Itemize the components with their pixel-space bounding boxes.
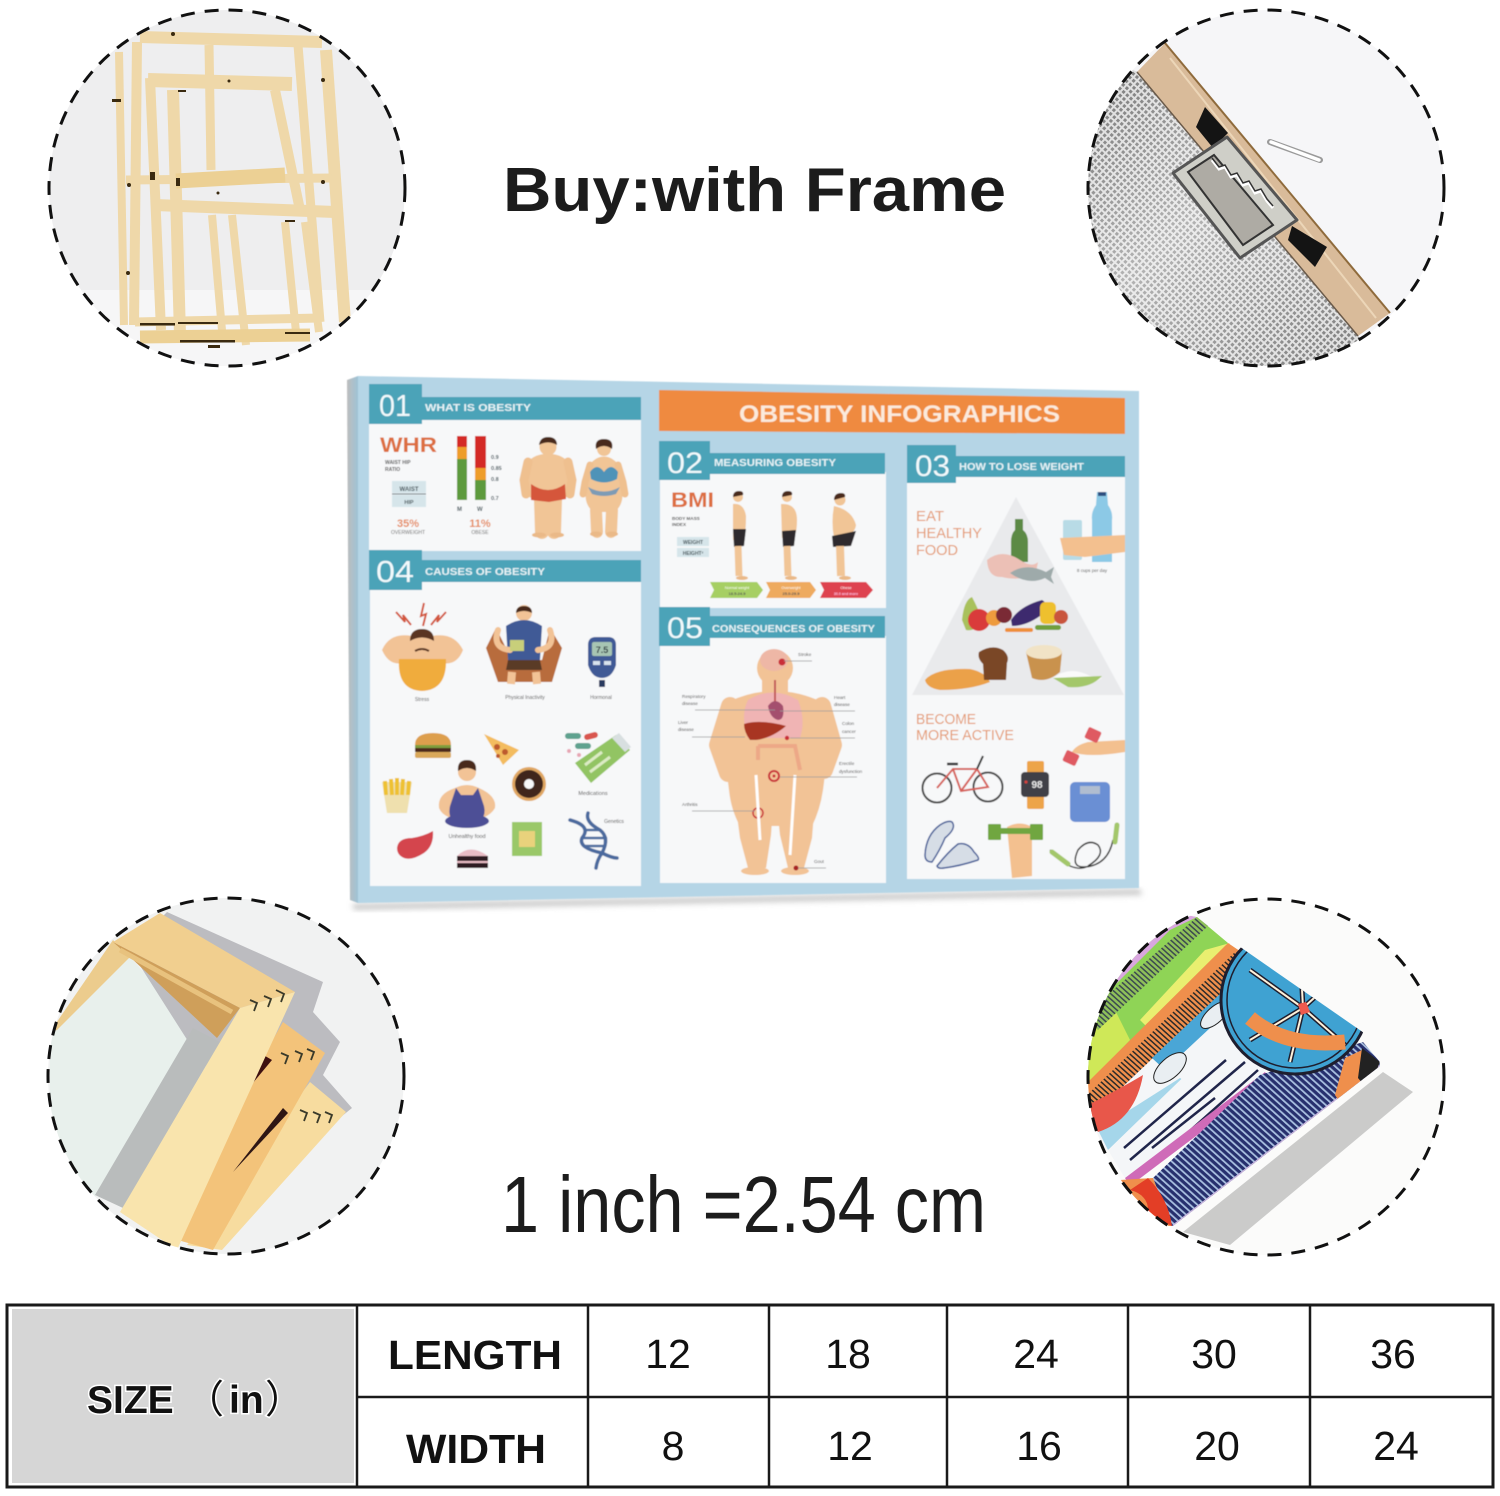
- organ labels: Arthritis: [682, 802, 698, 807]
- WHR block: WAIST: [400, 487, 419, 493]
- chart: waist hip ratio bars: 0.7: [491, 496, 499, 502]
- table header: size in inches: ）: [265, 1379, 304, 1422]
- table label: length: LENGTH: [388, 1332, 562, 1378]
- bmi arrow: normal: 18.5-24.9: [729, 591, 746, 596]
- panel 03: how to lose weight: [907, 445, 1125, 879]
- size table: [7, 1305, 1493, 1487]
- illustration: woman eating unhealthy food: [439, 760, 495, 840]
- icon: fish: [1010, 567, 1054, 584]
- BMI block: WEIGHT: [683, 540, 703, 546]
- label: genetics: Genetics: [604, 819, 624, 825]
- icon: vegetables and fruit: [962, 597, 1068, 632]
- organ labels: disease: [682, 701, 698, 706]
- photo circle: stacked frame corners: [46, 896, 406, 1256]
- heading: eat healthy food: [916, 508, 982, 559]
- heading: what is obesity: WHAT IS OBESITY: [425, 402, 531, 414]
- WHR block: WHR: [380, 434, 437, 457]
- illustration: inactive man in armchair: Physical Inactivity: [505, 695, 545, 701]
- chart: waist hip ratio bars: M: [457, 507, 462, 513]
- table values: length row: 30: [1191, 1331, 1237, 1377]
- table values: length row: 24: [1013, 1331, 1059, 1377]
- chart: waist hip ratio bars: 11%: [469, 518, 491, 530]
- number 03: 03: [915, 450, 950, 483]
- illustration: obese man side view: [832, 493, 856, 580]
- WHR block: [380, 434, 437, 536]
- icon: bicycle: [922, 756, 1002, 802]
- icon: running shoes: [925, 821, 978, 868]
- panel 02: measuring obesity: [659, 441, 886, 608]
- organ labels: Colon: [842, 721, 854, 726]
- chart: waist hip ratio bars: 0.9: [491, 455, 499, 461]
- icon: arm with dumbbell: [988, 824, 1043, 878]
- WHR block: RATIO: [385, 467, 400, 473]
- table header: size in inches: in: [229, 1379, 264, 1422]
- table values: length row: [645, 1331, 1416, 1377]
- icon: chevron marks on frame corners: [250, 990, 332, 1123]
- organ labels: Erectile: [839, 761, 855, 766]
- icon: cake: [457, 850, 488, 868]
- number 02: 02: [667, 447, 703, 480]
- illustration: overweight man: [781, 491, 797, 580]
- number 01: 01: [379, 388, 411, 423]
- table values: width row: [662, 1423, 1419, 1469]
- icon: weight scale: [1070, 782, 1110, 822]
- table values: width row: 20: [1194, 1423, 1240, 1469]
- bmi arrow: overweight: 25.0-29.9: [783, 591, 800, 596]
- icon: bag of chips: [512, 822, 542, 856]
- BMI block: HEIGHT²: [683, 551, 704, 557]
- canvas background: [358, 376, 1139, 903]
- table values: length row: 36: [1370, 1331, 1416, 1377]
- illustration: water intake: [1060, 492, 1125, 573]
- bmi arrow: normal: [710, 582, 763, 598]
- note: inch to cm conversion: 1 inch =2.54 cm: [501, 1160, 986, 1249]
- title banner: [659, 390, 1125, 434]
- heading: Buy with Frame: Buy:with Frame: [503, 156, 1006, 225]
- bmi arrow: overweight: [766, 582, 816, 598]
- table values: width row: 8: [662, 1423, 684, 1469]
- illustration: obese woman: [583, 439, 625, 536]
- panel 01: what is obesity: [369, 384, 641, 551]
- title banner: OBESITY INFOGRAPHICS: [739, 401, 1060, 428]
- icon: chicken: [987, 554, 1038, 579]
- heading: become more active: MORE ACTIVE: [916, 727, 1014, 744]
- organ labels: Liver: [678, 720, 688, 725]
- table values: length row: 18: [825, 1331, 871, 1377]
- icon: fries: [382, 778, 412, 813]
- icon: burger: [415, 733, 451, 758]
- organ labels: Heart: [834, 695, 846, 700]
- organ labels: dysfunction: [839, 769, 863, 774]
- BMI block: [671, 489, 714, 557]
- photo circle: stacked wooden frames: [48, 8, 406, 368]
- icon: DNA helix: [570, 813, 617, 868]
- illustration: water intake: 8 cups per day: [1077, 568, 1108, 573]
- number 04: 04: [376, 554, 414, 589]
- photo circle: sawtooth hanger on back of frame: [1086, 8, 1446, 368]
- chart: waist hip ratio bars: W: [477, 507, 483, 513]
- icon: fitness watch: 98: [1031, 780, 1043, 791]
- WHR block: OVERWEIGHT: [391, 530, 425, 536]
- canvas side edge: [347, 376, 358, 903]
- table values: length row: 12: [645, 1331, 691, 1377]
- WHR block: 35%: [397, 518, 419, 530]
- bmi arrow: normal: Normal weight: [725, 586, 750, 590]
- icon: pizza slice: [484, 734, 519, 765]
- panel 05: consequences of obesity: [659, 607, 886, 883]
- heading: measuring obesity: MEASURING OBESITY: [714, 458, 836, 469]
- icon: pills and medication box: Medications: [578, 791, 608, 797]
- illustration: inactive man in armchair: [486, 605, 562, 701]
- illustration: normal weight man: [733, 491, 748, 580]
- icon: hand holding small weights: [1062, 727, 1125, 766]
- BMI block: INDEX: [672, 522, 687, 527]
- icon: hanger slot in white backing: [1270, 142, 1320, 160]
- organ labels: Respiratory: [682, 694, 706, 699]
- bmi arrow: overweight: Overweight: [781, 586, 802, 590]
- WHR block: HIP: [404, 500, 414, 506]
- table values: width row: 24: [1373, 1423, 1419, 1469]
- illustration: stressed man: Stress: [415, 697, 430, 703]
- table header: size in inches: SIZE: [87, 1379, 174, 1422]
- organ labels: disease: [678, 727, 694, 732]
- canvas shadow: [352, 889, 1142, 910]
- heading: eat healthy food: FOOD: [916, 542, 958, 559]
- bmi arrow: obese: Obese: [840, 586, 852, 590]
- WHR block: WAIST HIP: [385, 460, 411, 466]
- table values: width row: 16: [1016, 1423, 1062, 1469]
- chart: waist hip ratio bars: [457, 436, 502, 536]
- icon: glucose meter: Hormonal: [590, 695, 612, 701]
- icon: oil bottle: [1011, 519, 1028, 562]
- heading: eat healthy food: EAT: [916, 508, 944, 525]
- organ labels: disease: [834, 702, 850, 707]
- icon: steak: [397, 831, 433, 859]
- icon: glucose meter: [588, 637, 616, 701]
- BMI block: BMI: [671, 489, 714, 512]
- chart: waist hip ratio bars: OBESE: [471, 530, 489, 536]
- chart: waist hip ratio bars: 0.8: [491, 477, 499, 483]
- number 05: 05: [667, 612, 703, 645]
- heading: become more active: BECOME: [916, 711, 976, 728]
- heading: how to lose weight: HOW TO LOSE WEIGHT: [959, 462, 1084, 473]
- organ labels: Stroke: [798, 652, 812, 657]
- BMI block: BODY MASS: [672, 516, 700, 521]
- bmi arrow: obese: [820, 582, 873, 598]
- panel 04: causes of obesity: [369, 550, 641, 886]
- table header: size in inches: （: [185, 1379, 224, 1422]
- table values: width row: 12: [827, 1423, 873, 1469]
- bmi arrow: obese: 30.0 and more: [834, 592, 858, 596]
- illustration: stressed man: [382, 603, 463, 703]
- icon: pills and medication box: [565, 731, 631, 797]
- heading: consequences of obesity: CONSEQUENCES OF OBESITY: [712, 624, 875, 635]
- heading: become more active: [916, 711, 1014, 744]
- icon: bread and grains: [925, 645, 1102, 690]
- panel: canvas print of obesity infographic: [347, 376, 1142, 910]
- icon: skipping rope: [1050, 825, 1117, 868]
- icon: glucose meter: 7.5: [596, 645, 608, 655]
- chart: waist hip ratio bars: 0.85: [491, 466, 502, 472]
- organ labels: cancer: [842, 729, 856, 734]
- table label: width: WIDTH: [406, 1426, 546, 1472]
- illustration: human body with organs: [718, 649, 833, 875]
- organ labels: Gout: [814, 859, 825, 864]
- organ labels: [678, 652, 863, 864]
- food pyramid: [912, 497, 1124, 695]
- heading: eat healthy food: HEALTHY: [916, 525, 982, 542]
- photo circle: rolled canvas corner: [1086, 898, 1446, 1256]
- illustration: woman eating unhealthy food: Unhealthy food: [448, 834, 486, 840]
- icon: fitness watch: [1021, 761, 1049, 809]
- organ leader lines: [692, 661, 857, 868]
- illustration: obese man: [522, 437, 574, 538]
- icon: donut: [512, 767, 546, 801]
- heading: causes of obesity: CAUSES OF OBESITY: [425, 566, 545, 578]
